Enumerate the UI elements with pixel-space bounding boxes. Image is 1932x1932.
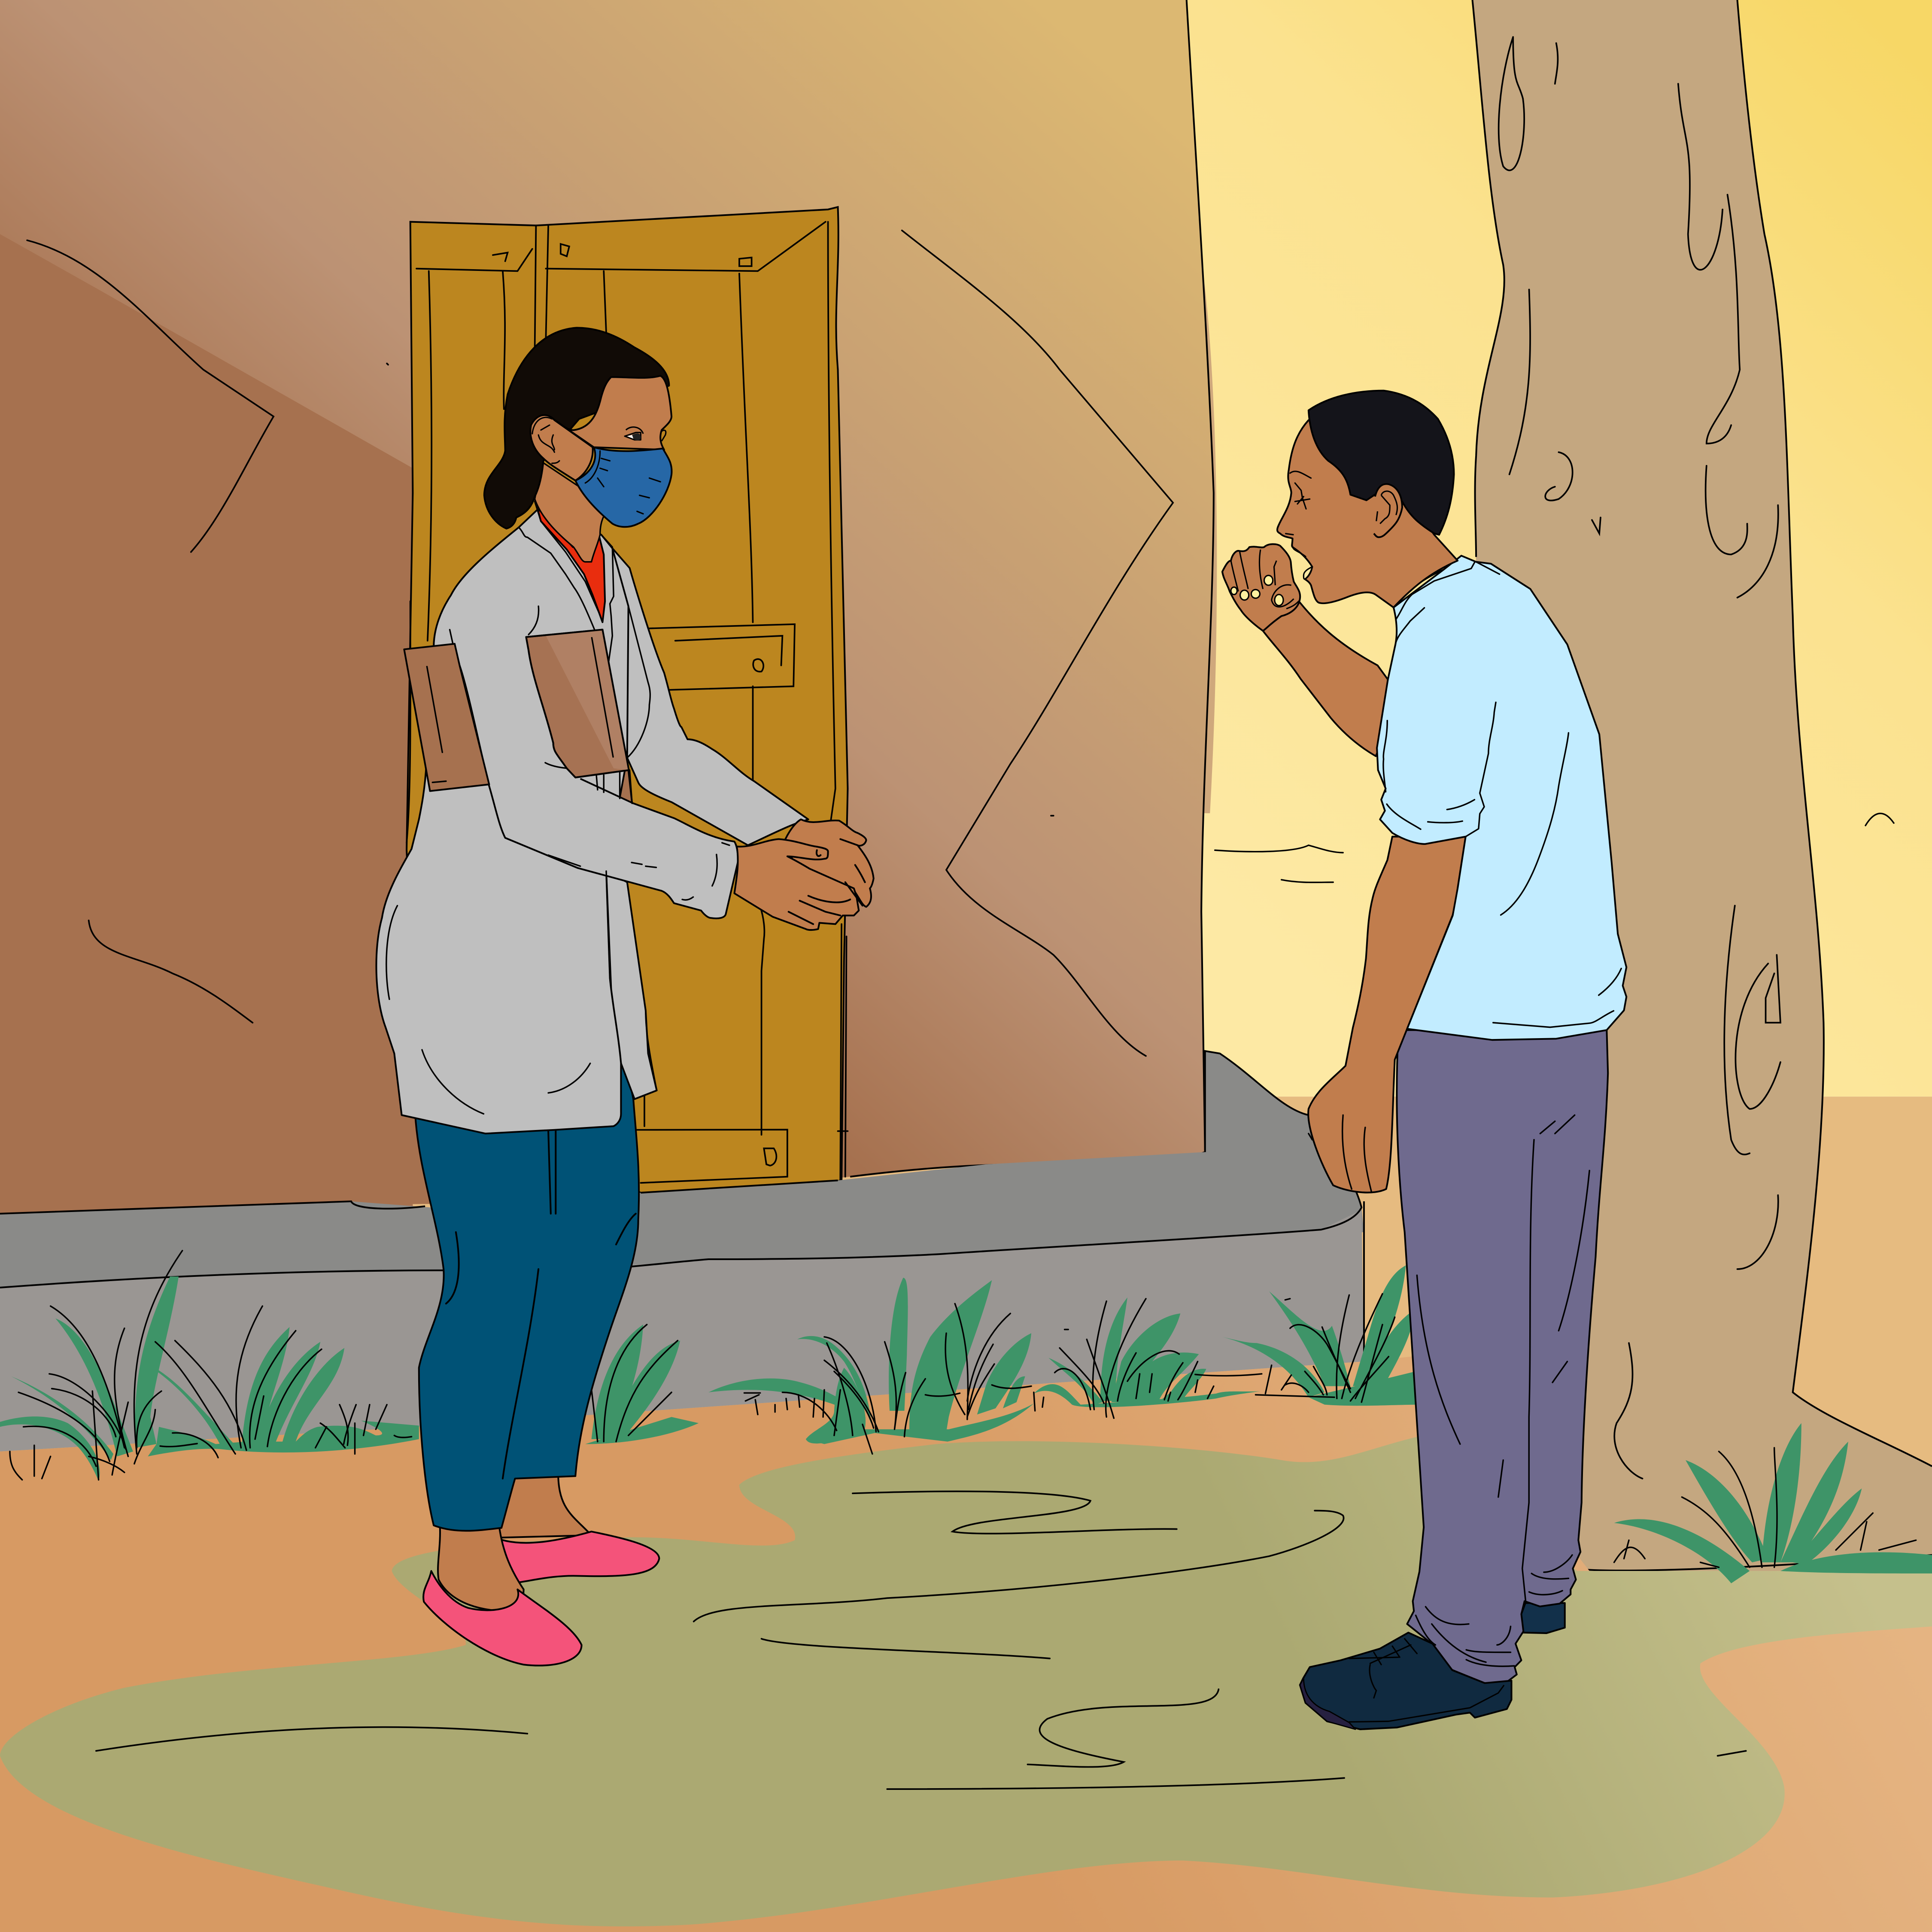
man: raised arm	[1241, 602, 1392, 756]
man: ear details	[1376, 491, 1397, 524]
man: knuckle lines and fingernails	[1231, 550, 1300, 609]
green ground patch	[0, 1435, 1932, 1926]
woman: folder under arm, back part	[404, 644, 489, 791]
grass blade lines	[10, 1251, 1395, 1480]
grass clump at tree base	[1614, 1423, 1932, 1583]
woman: neck	[535, 462, 604, 562]
man: open mouth	[1303, 567, 1312, 579]
woman figure	[376, 328, 874, 1665]
step outlines	[0, 1051, 1364, 1361]
sky wind lines	[1215, 814, 1894, 882]
woman: far hand	[784, 819, 874, 907]
man: ear	[1374, 484, 1402, 537]
woman: belly band under arm	[596, 770, 632, 803]
woman: finger lines	[789, 839, 865, 924]
woman: near coat arm	[459, 665, 738, 918]
woman: near leg and foot	[438, 1525, 524, 1611]
grass clumps behind figures	[0, 1251, 1421, 1481]
step: upper concrete slab	[0, 1051, 1364, 1306]
door panel lines	[407, 222, 848, 1183]
woman: lab coat body	[376, 505, 629, 1133]
house wall	[0, 0, 1217, 1214]
step: lower concrete slab	[0, 1210, 1364, 1452]
man: back shoe	[1521, 1603, 1565, 1633]
background: far ground	[0, 1097, 1932, 1932]
foreground ground	[0, 1355, 1932, 1932]
door	[407, 207, 848, 1193]
woman: trousers	[415, 990, 639, 1531]
background: sky	[0, 0, 1932, 1097]
tree bark lines	[1499, 37, 1780, 1479]
man: hair	[1309, 391, 1454, 535]
man: front shoe	[1300, 1633, 1512, 1729]
woman: ear and cheek	[530, 415, 593, 480]
woman: far coat arm	[604, 548, 808, 845]
man: eye and brow	[1290, 471, 1311, 509]
man: fist	[1222, 544, 1300, 631]
man: t-shirt fold lines	[1383, 562, 1621, 1027]
woman: eye	[625, 427, 666, 441]
man: lower arm and hand	[1308, 837, 1466, 1193]
man: t-shirt	[1377, 556, 1626, 1040]
man: trouser fold lines	[1416, 1115, 1589, 1666]
woman: coat front strip	[606, 871, 657, 1099]
man: trousers	[1397, 1030, 1608, 1684]
woman: far shoe	[490, 1531, 659, 1583]
man: finger lines	[1309, 1115, 1371, 1191]
woman: folder under arm, front part	[526, 630, 632, 803]
woman: near hand	[734, 839, 859, 930]
woman: coat fold lines	[386, 606, 729, 1114]
man: neck and face	[1277, 419, 1458, 608]
woman: ear details	[532, 417, 559, 463]
wall crack lines	[27, 231, 1173, 1056]
woman: trouser fold lines	[446, 1131, 636, 1479]
tree trunk	[1473, 0, 1932, 1571]
woman: shirt	[537, 507, 605, 622]
woman: near shoe	[423, 1571, 582, 1665]
woman: far leg and foot	[497, 1473, 592, 1538]
ground squiggle lines	[96, 1492, 1746, 1789]
woman: face mask	[575, 447, 671, 527]
woman: face	[554, 376, 671, 450]
woman: folder under arm, back part details	[427, 667, 446, 782]
man figure	[1222, 391, 1626, 1729]
woman: hair back	[484, 328, 669, 529]
woman: coat lapel lines	[519, 501, 650, 758]
woman: near arm outline	[459, 665, 738, 918]
man: nostril and lip	[1285, 534, 1306, 557]
